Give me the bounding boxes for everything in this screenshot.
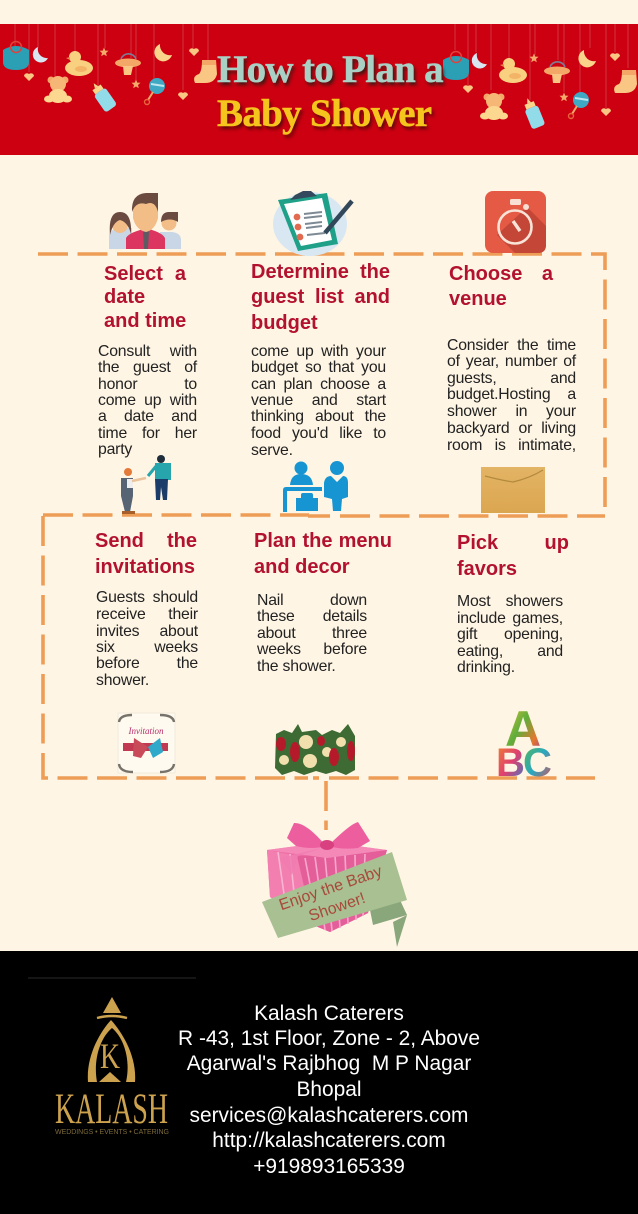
logo tagline: WEDDINGS • EVENTS • CATERING (55, 1129, 169, 1136)
step 5 text: weeks before (257, 641, 367, 658)
step 1 text: Consult with (98, 343, 197, 360)
step 4 heading: Send the (95, 530, 197, 552)
step 5 text: Nail down (257, 592, 367, 609)
icon: pink gift box (267, 822, 387, 932)
banner text: Shower! (307, 890, 368, 925)
step 4 text: before the (96, 655, 198, 672)
step 4 text: six weeks (96, 639, 198, 656)
step 4 text (96, 589, 198, 689)
icon: invitation card: Invitation (128, 726, 164, 736)
step 1 text: party (98, 441, 132, 458)
step 4 heading (95, 530, 197, 578)
step 6 text (457, 593, 563, 676)
step 4 text: invites about (96, 623, 198, 640)
step 2 heading (251, 261, 390, 334)
contact details: +919893165339 (253, 1155, 405, 1178)
step 1 text: a date and (98, 408, 197, 425)
step 5 text: the shower. (257, 658, 336, 675)
step 1 text: honor to (98, 376, 197, 393)
step 4 heading: invitations (95, 556, 195, 578)
contact details: R -43, 1st Floor, Zone - 2, Above (178, 1027, 480, 1050)
step 3 text: budget.Hosting a (447, 386, 576, 403)
icon: envelope (481, 467, 545, 513)
step 2 text: thinking about the (251, 408, 386, 425)
step 3 heading (449, 263, 554, 310)
logo emblem: K (100, 1036, 120, 1076)
step 4 text: Guests should (96, 589, 198, 606)
step 6 text: gift opening, (457, 626, 563, 643)
contact details: Kalash Caterers (254, 1002, 404, 1025)
hanging baby toys, left (3, 24, 217, 113)
step 2 heading: Determine the (251, 261, 390, 283)
ribbon banner (262, 852, 407, 947)
step 3 text (447, 337, 576, 454)
step 5 text (257, 592, 367, 675)
step 5 text: these details (257, 608, 367, 625)
step 2 text: serve. (251, 442, 293, 459)
logo wordmark: KALASH (55, 1086, 168, 1133)
step 3 text: guests, and (447, 370, 576, 387)
step 4 text: shower. (96, 672, 149, 689)
step 3 text: Consider the time (447, 337, 576, 354)
step 1 text (98, 343, 198, 458)
step 1 text: come up with (98, 392, 197, 409)
step 3 text: room is intimate, (447, 437, 576, 454)
step 2 text: venue and start (251, 392, 386, 409)
step 2 text: can plan choose a (251, 376, 386, 393)
Kalash logo (55, 997, 169, 1136)
icon: handshake people (121, 455, 171, 514)
step 1 text: time for her (98, 425, 197, 442)
step 3 heading: venue (449, 288, 507, 310)
contact details: Bhopal (296, 1078, 362, 1101)
icon: clipboard checklist (273, 191, 352, 256)
title: How to Plan a (217, 48, 443, 91)
contact details (178, 1002, 480, 1178)
icon: colourful ABC letters (496, 701, 552, 785)
hanging baby toys, right (443, 24, 637, 130)
step 5 heading: Plan the menu (254, 530, 392, 552)
icon: colourful ABC letters: B (496, 741, 525, 785)
step 6 text: include games, (457, 610, 563, 627)
step 1 heading: and time (104, 310, 186, 332)
step 1 heading: Select a (104, 263, 186, 285)
step 1 text: the guest of (98, 359, 197, 376)
icon: colourful ABC letters: C (523, 741, 552, 785)
contact details: services@kalashcaterers.com (190, 1104, 468, 1127)
step 2 text: budget so that you (251, 359, 386, 376)
step 6 text: Most showers (457, 593, 563, 610)
icon: invitation card (118, 713, 175, 773)
contact details: http://kalashcaterers.com (212, 1129, 446, 1152)
icon: stopwatch (485, 191, 546, 253)
step 6 heading: Pick up (457, 532, 569, 554)
icon: floral garland (275, 724, 355, 775)
step 4 text: receive their (96, 606, 198, 623)
step 3 text: shower in your (447, 403, 576, 420)
banner text (277, 863, 391, 933)
step 6 heading (457, 532, 569, 580)
step 6 text: eating, and (457, 643, 563, 660)
step 2 text (251, 343, 386, 459)
step 1 heading: date (104, 286, 145, 308)
step 2 text: food you'd like to (251, 425, 386, 442)
step 2 text: come up with your (251, 343, 386, 360)
step 5 heading (254, 530, 392, 578)
step 5 heading: and decor (254, 556, 350, 578)
step 5 text: about three (257, 625, 367, 642)
icon: desk meeting (283, 461, 348, 512)
footer rule (28, 977, 196, 979)
title: Baby Shower (217, 92, 431, 135)
step 2 heading: budget (251, 312, 318, 334)
step 3 text: backyard or living (447, 420, 576, 437)
header banner (0, 24, 638, 155)
step 3 text: of year, number of (447, 353, 576, 370)
footer background (0, 951, 638, 1214)
dashed route line (38, 254, 605, 830)
icon: colourful ABC letters: A (505, 701, 541, 757)
step 1 heading (104, 263, 186, 332)
step 6 heading: favors (457, 558, 517, 580)
step 3 heading: Choose a (449, 263, 553, 285)
step 2 heading: guest list and (251, 286, 390, 308)
banner text: Enjoy the Baby (277, 863, 384, 914)
title (217, 48, 446, 140)
step 6 text: drinking. (457, 659, 515, 676)
icon: family group (109, 193, 181, 249)
contact details: Agarwal's Rajbhog M P Nagar (187, 1052, 471, 1075)
